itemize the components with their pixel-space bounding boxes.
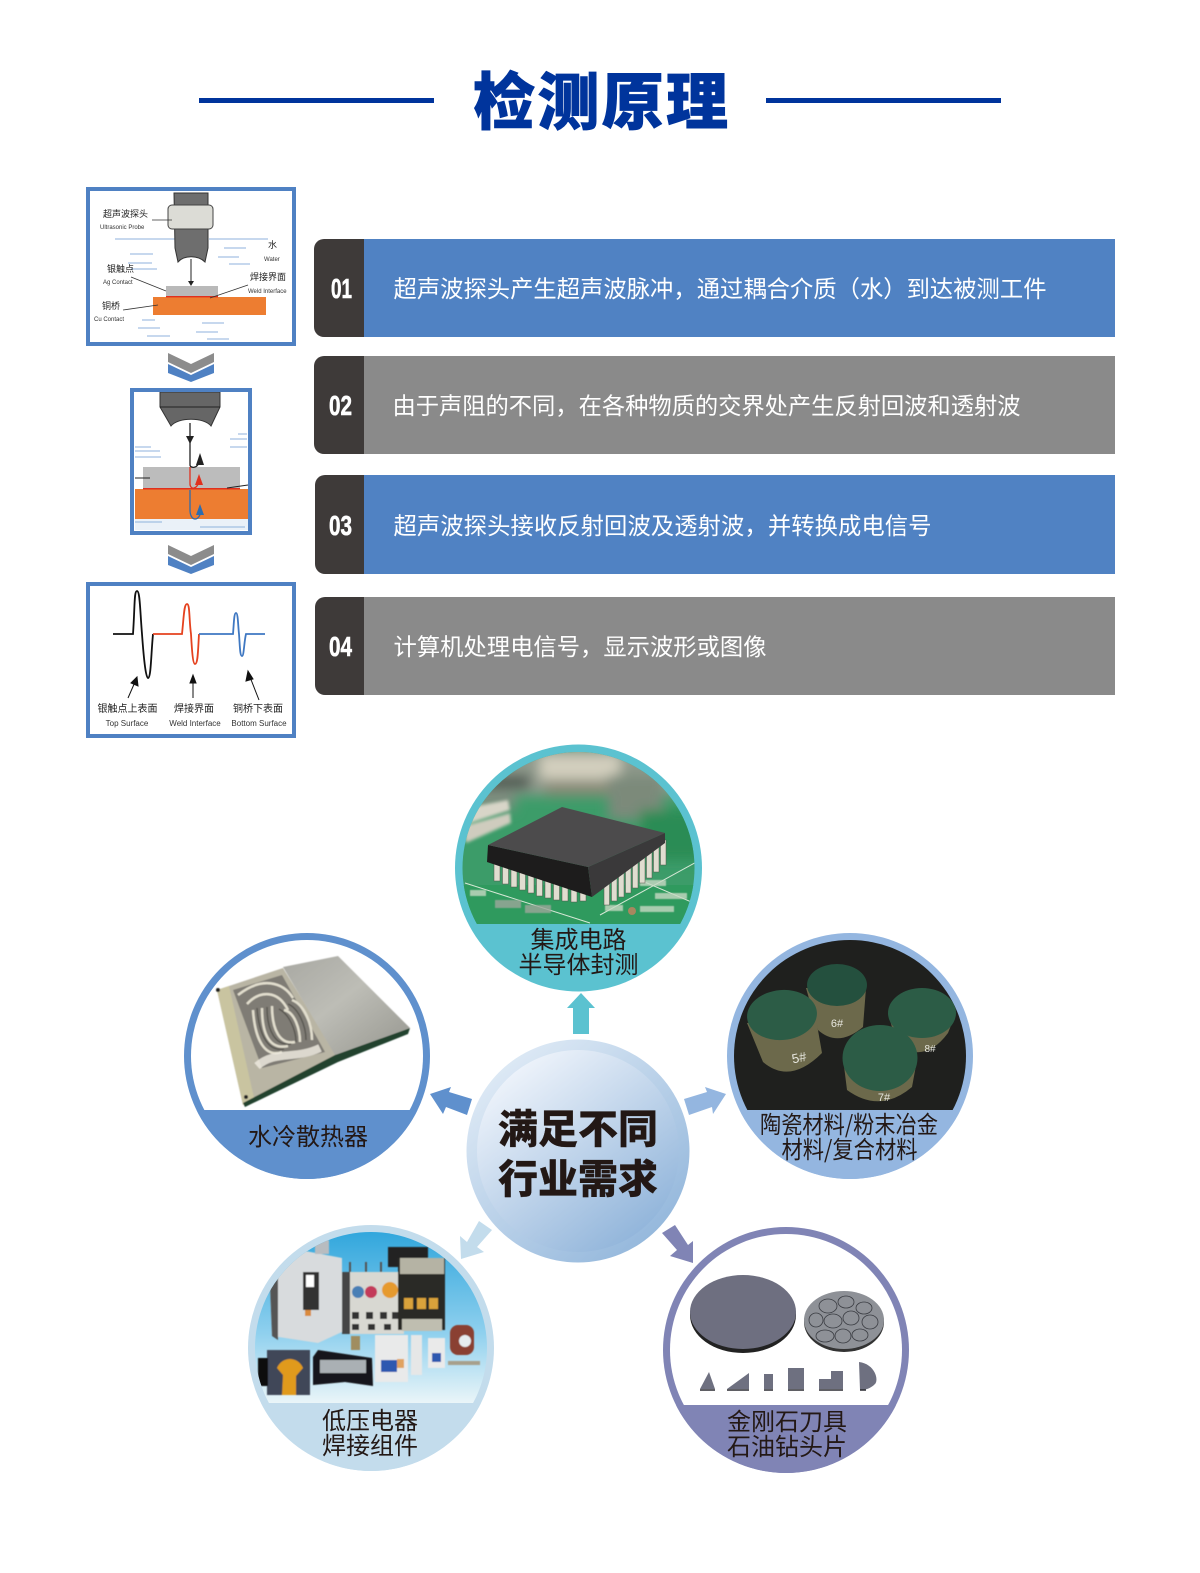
photo: chip on circuit board bbox=[462, 752, 694, 924]
panel: water-cooled heat sink circle bbox=[184, 933, 430, 1180]
panel: echo waveform bbox=[88, 584, 294, 736]
panel: echo diagram bbox=[132, 390, 250, 533]
probe diagram labels: Weld Interface bbox=[248, 289, 287, 295]
wave paths bbox=[190, 423, 201, 519]
thermal relay bbox=[342, 1272, 404, 1334]
panel: step 02 bbox=[314, 356, 1115, 454]
cylinder 5# bbox=[747, 1021, 822, 1072]
panel: diamond tools circle bbox=[663, 1227, 909, 1475]
probe diagram labels: Water bbox=[264, 257, 280, 263]
photo: ceramic cylinders: 7# bbox=[878, 1092, 891, 1104]
pins bbox=[494, 840, 666, 905]
waveform labels: Weld Interface bbox=[169, 719, 221, 728]
panel: step 02: 由于声阻的不同，在各种物质的交界处产生反射回波和透射波 bbox=[392, 387, 1020, 421]
panel: step 02: 02 bbox=[329, 390, 352, 421]
rotary switch bbox=[267, 1350, 310, 1395]
miniature breakers bbox=[375, 1335, 408, 1382]
panel: step 03: 03 bbox=[329, 510, 352, 541]
panel: water-cooled heat sink circle: 水冷散热器 bbox=[248, 1117, 368, 1152]
panel: step 01: 01 bbox=[331, 273, 352, 304]
probe diagram labels: 银触点 bbox=[107, 262, 134, 275]
arrows bbox=[128, 671, 259, 700]
current transformer bbox=[450, 1325, 474, 1355]
probe diagram labels: 水 bbox=[268, 238, 277, 251]
waveform bbox=[113, 591, 265, 678]
panel: integrated circuits circle: 集成电路 bbox=[530, 920, 626, 955]
panel: ceramic materials circle bbox=[727, 933, 973, 1180]
panel: low-voltage electrical circle bbox=[248, 1225, 494, 1473]
probe diagram labels: Ultrasonic Probe bbox=[100, 225, 145, 231]
panel: central hub circle bbox=[466, 1040, 690, 1262]
arrow: to electrical bbox=[460, 1221, 492, 1259]
panel: diamond tools circle: 金刚石刀具 bbox=[727, 1402, 847, 1437]
probe diagram labels: Cu Contact bbox=[94, 317, 124, 323]
waveform labels: Top Surface bbox=[106, 719, 149, 728]
panel: central hub circle: 行业需求 bbox=[498, 1147, 658, 1205]
arrow: to heat sink bbox=[430, 1087, 472, 1115]
waveform labels: Bottom Surface bbox=[231, 719, 287, 728]
waveform labels: 铜桥下表面 bbox=[233, 700, 283, 715]
panel: step 04 bbox=[315, 597, 1115, 695]
specimen bbox=[153, 286, 266, 315]
arrow: to ceramics bbox=[684, 1087, 726, 1115]
panel: ceramic materials circle: 材料/复合材料 bbox=[782, 1130, 918, 1165]
arrow: to integrated circuits bbox=[567, 993, 595, 1034]
panel: ceramic materials circle: 陶瓷材料/粉末冶金 bbox=[760, 1105, 938, 1140]
panel: integrated circuits circle bbox=[455, 744, 710, 992]
icon: probe bbox=[168, 193, 213, 286]
waveform labels: 焊接界面 bbox=[174, 700, 214, 715]
photo: ceramic cylinders: 6# bbox=[831, 1018, 844, 1030]
cylinder 7# bbox=[844, 1068, 916, 1102]
probe diagram labels: Ag Contact bbox=[103, 280, 133, 286]
panel: diamond tools circle: 石油钻头片 bbox=[727, 1427, 847, 1462]
probe diagram labels bbox=[94, 207, 287, 323]
breaker bbox=[270, 1250, 342, 1343]
probe diagram labels: 铜桥 bbox=[102, 299, 120, 312]
meter bbox=[313, 1350, 373, 1386]
panel: step 04: 计算机处理电信号，显示波形或图像 bbox=[394, 628, 766, 662]
photo: diamond discs and tool inserts bbox=[690, 1275, 884, 1390]
panel: step 03: 超声波探头接收反射回波及透射波，并转换成电信号 bbox=[394, 507, 932, 541]
panel: step 01 bbox=[314, 239, 1115, 337]
photo: milled cold plate bbox=[216, 956, 410, 1107]
probe diagram labels: 焊接界面 bbox=[250, 270, 286, 283]
photo: ceramic cylinders bbox=[730, 935, 970, 1110]
probe diagram labels: 超声波探头 bbox=[103, 207, 148, 220]
title: 检测原理 bbox=[473, 52, 728, 142]
photo: ceramic cylinders: 5# bbox=[790, 1049, 808, 1066]
panel: central hub circle: 满足不同 bbox=[498, 1097, 658, 1155]
panel: step 03 bbox=[315, 475, 1115, 574]
cylinder 6# bbox=[806, 988, 866, 1038]
panel: low-voltage electrical circle: 低压电器 bbox=[322, 1401, 418, 1436]
photo: ceramic cylinders: 8# bbox=[924, 1044, 936, 1055]
title bbox=[199, 52, 1001, 142]
arrow: chevron down 1 bbox=[168, 353, 214, 382]
panel: step 04: 04 bbox=[329, 631, 352, 662]
photo: electrical components bbox=[248, 1228, 494, 1403]
arrow: to diamond tools bbox=[662, 1225, 693, 1263]
waveform labels: 银触点上表面 bbox=[98, 700, 158, 715]
waveform labels bbox=[98, 700, 287, 728]
panel: integrated circuits circle: 半导体封测 bbox=[518, 945, 638, 980]
panel: ultrasonic probe diagram bbox=[88, 189, 294, 344]
arrow: chevron down 2 bbox=[168, 545, 214, 574]
panel: low-voltage electrical circle: 焊接组件 bbox=[322, 1426, 418, 1461]
water lines bbox=[115, 239, 268, 339]
panel: step 01: 超声波探头产生超声波脉冲，通过耦合介质（水）到达被测工件 bbox=[394, 270, 1046, 304]
contactor bbox=[388, 1247, 428, 1267]
cylinder 8# bbox=[890, 1022, 951, 1052]
